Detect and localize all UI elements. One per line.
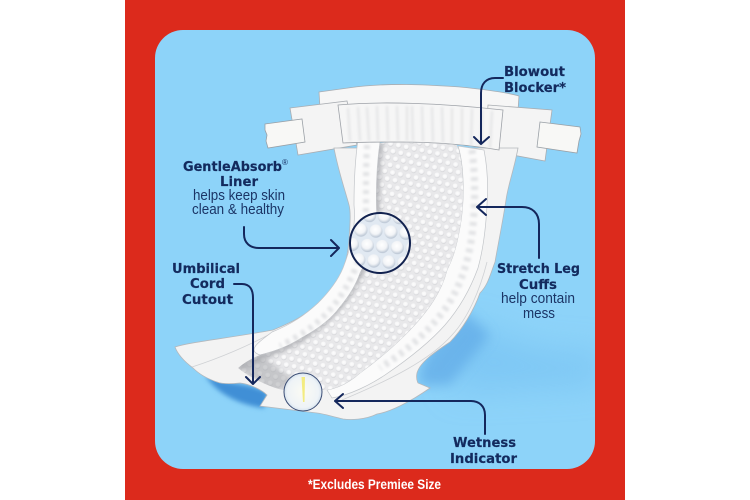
label: umbilical cord cutout: Umbilical (172, 261, 240, 277)
label: stretch leg cuffs: Stretch Leg (497, 261, 580, 277)
right leg cuff (327, 146, 488, 398)
left side tab (290, 101, 357, 155)
arrow: gentleabsorb liner (244, 227, 339, 256)
arrow: blowout blocker (474, 78, 503, 144)
label: wetness indicator: Wetness (453, 435, 516, 451)
yellow indicator line (302, 377, 305, 402)
label: stretch leg cuffs: Cuffs (519, 277, 557, 293)
diaper illustration (175, 84, 581, 419)
label: umbilical cord cutout (172, 261, 240, 308)
label: wetness indicator (450, 435, 517, 467)
blue rounded panel (155, 30, 600, 469)
label: stretch leg cuffs (497, 261, 580, 322)
right tape (537, 122, 581, 153)
dotted absorbent liner (238, 142, 464, 390)
waistband ruching (348, 106, 492, 148)
label: stretch leg cuffs: mess (523, 306, 555, 322)
right cuff ruffle (380, 150, 475, 368)
left tape (265, 119, 305, 148)
back waist panel (319, 84, 519, 125)
label: gentleabsorb liner: GentleAbsorb (183, 159, 282, 175)
label: umbilical cord cutout: Cord (190, 276, 225, 292)
left cuff ruffle (280, 145, 367, 346)
label: gentleabsorb liner: Liner (220, 174, 258, 190)
arrow: stretch leg cuffs (477, 199, 539, 258)
left leg cuff (254, 140, 380, 355)
label: gentleabsorb liner: clean & healthy (192, 202, 285, 218)
magnifier: wetness indicator (284, 373, 322, 411)
label: gentleabsorb liner: ® (282, 158, 288, 167)
label: blowout blocker (504, 64, 566, 96)
red background panel (125, 0, 625, 500)
diaper body (175, 148, 518, 419)
label: blowout blocker: Blocker* (504, 80, 566, 96)
label: blowout blocker: Blowout (504, 64, 566, 80)
arrow: umbilical cord cutout (234, 284, 260, 384)
magnifier: GentleAbsorb liner (350, 213, 410, 273)
label: wetness indicator: Indicator (450, 451, 517, 467)
front waistband (338, 103, 503, 150)
right side tab (485, 105, 552, 161)
arrow: wetness indicator (335, 394, 485, 434)
label: umbilical cord cutout: Cutout (182, 292, 234, 308)
label: stretch leg cuffs: help contain (501, 291, 575, 307)
hem stitch line (192, 262, 487, 400)
footnote: *Excludes Premiee Size (308, 477, 441, 492)
label: gentleabsorb liner (183, 158, 288, 218)
label: gentleabsorb liner: helps keep skin (193, 188, 285, 204)
